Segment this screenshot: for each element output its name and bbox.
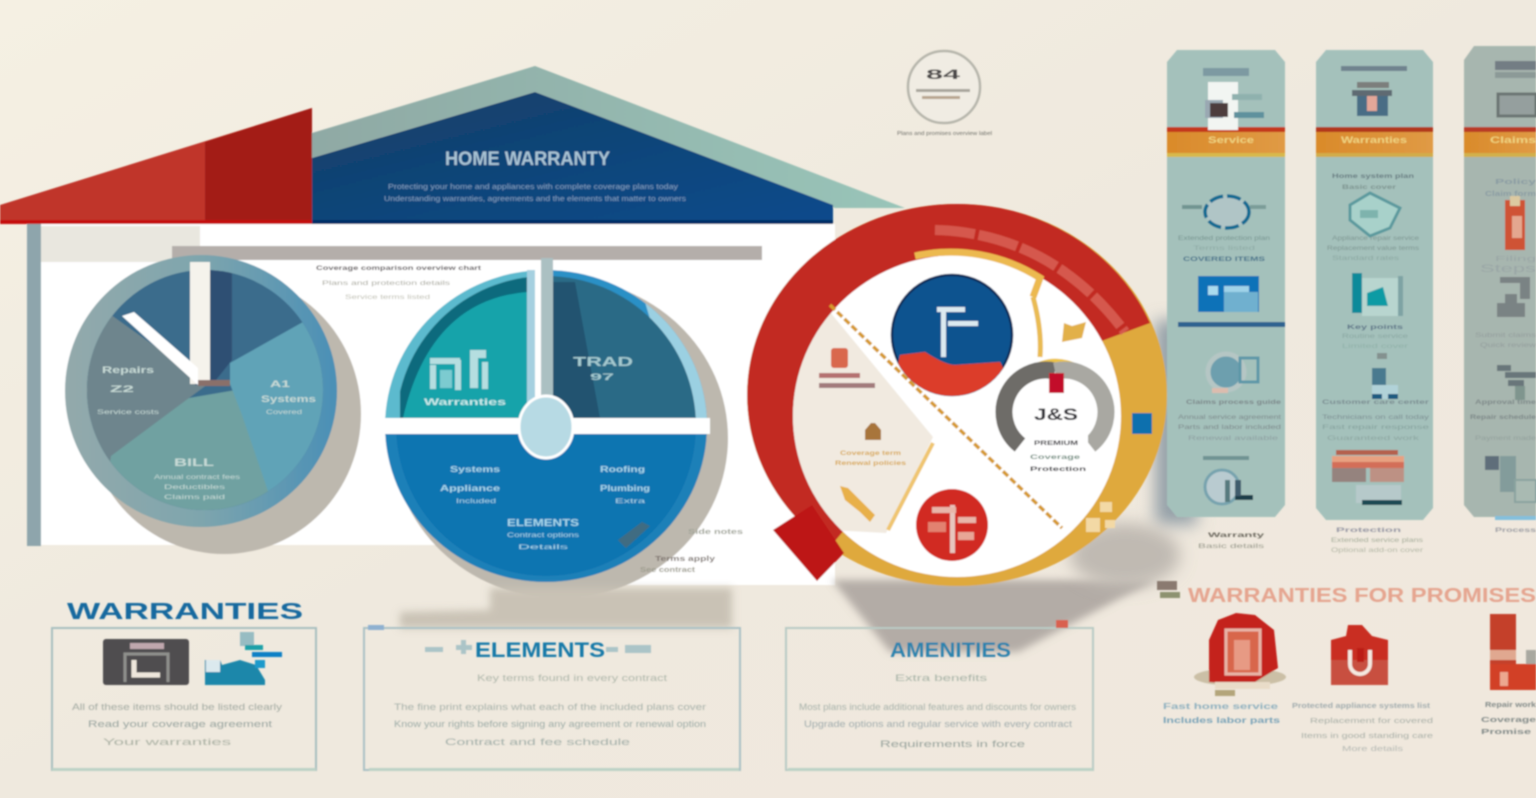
col 3 text b: Steps bbox=[1480, 263, 1536, 275]
roof title: HOME WARRANTY bbox=[445, 149, 610, 170]
title ornaments bbox=[425, 640, 651, 654]
column panel 3 bbox=[1464, 46, 1536, 517]
pie chart 2 bbox=[380, 258, 715, 589]
column 3 caption bbox=[1495, 516, 1536, 534]
col 2 text c: Routine service bbox=[1342, 334, 1409, 340]
col 2 text b: Appliance repair service bbox=[1332, 236, 1420, 242]
column panel 1 bbox=[1167, 50, 1285, 517]
pie 1 shadow bbox=[87, 274, 361, 554]
blue card bbox=[1198, 276, 1259, 312]
gauge text: Protection bbox=[1030, 467, 1087, 473]
dark slice label: TRAD bbox=[573, 354, 633, 369]
icon: teal tool bbox=[205, 632, 282, 685]
col 2 text c: Limited cover bbox=[1342, 344, 1408, 350]
house icon bbox=[430, 350, 488, 390]
middle caption: More details bbox=[1342, 746, 1404, 753]
gauge text: PREMIUM bbox=[1034, 441, 1078, 447]
red accent bbox=[1056, 620, 1068, 628]
cream slice bbox=[780, 312, 933, 533]
column 2 caption: Extended service plans bbox=[1331, 538, 1423, 544]
icon: chart bbox=[1352, 273, 1403, 316]
col 1 gray text: Annual service agreement bbox=[1178, 415, 1281, 421]
slice rules bbox=[819, 373, 860, 378]
pie 2 shadow bbox=[392, 278, 728, 598]
blue square marker bbox=[1132, 413, 1152, 434]
pie 1 labels: A1 bbox=[270, 379, 290, 389]
column 2 heading: Warranties bbox=[1341, 135, 1407, 145]
right caption bbox=[1481, 702, 1536, 736]
clock hands bbox=[190, 262, 210, 384]
roof description: Understanding warranties, agreements and the elements that matter to owners bbox=[384, 194, 686, 203]
box 1 text: Read your coverage agreement bbox=[88, 719, 273, 729]
column 2 caption: Optional add-on cover bbox=[1331, 548, 1423, 554]
white main panel bbox=[41, 224, 835, 585]
col 3 text d: Approval time bbox=[1475, 400, 1536, 406]
lower slice labels: Roofing bbox=[600, 465, 645, 474]
pie 1 labels: Repairs bbox=[102, 365, 154, 375]
box: warranties bbox=[52, 628, 316, 771]
box 3 text: Requirements in force bbox=[880, 739, 1025, 749]
middle caption: Replacement for covered bbox=[1310, 718, 1433, 725]
column 3 caption: Process bbox=[1495, 528, 1536, 534]
pie chart 1 bbox=[60, 255, 361, 554]
col 3 text c: Submit claims bbox=[1475, 333, 1536, 339]
right caption: Promise bbox=[1481, 729, 1531, 736]
teal roof band bbox=[312, 66, 905, 208]
icon: gear bbox=[1208, 354, 1258, 393]
lower slice labels: Plumbing bbox=[600, 484, 650, 493]
pie 1 labels bbox=[97, 365, 316, 501]
column 1 caption: Warranty bbox=[1208, 533, 1265, 539]
column 1 caption bbox=[1198, 533, 1265, 550]
middle caption: Items in good standing care bbox=[1301, 733, 1433, 740]
teal label: Warranties bbox=[424, 397, 506, 407]
icon: diamond gear bbox=[1350, 193, 1400, 236]
box 1 text bbox=[72, 702, 283, 747]
col 3 text d: Payment made bbox=[1475, 436, 1536, 442]
column panel 2 bbox=[1316, 50, 1433, 520]
box 3 text: Most plans include additional features and discounts for owners bbox=[799, 702, 1077, 712]
icon captions: Fast home service bbox=[1163, 702, 1279, 711]
column 2 caption bbox=[1331, 528, 1423, 554]
pie 2 side notes: Side notes bbox=[688, 529, 743, 536]
dark slice label bbox=[573, 354, 633, 382]
box 2 text: The fine print explains what each of the included plans cover bbox=[394, 702, 706, 712]
pencil mark bbox=[618, 522, 650, 548]
icon: red bottle bbox=[1505, 196, 1525, 250]
col 2 gray text: Fast repair response bbox=[1322, 425, 1430, 431]
icon: document bbox=[1203, 68, 1264, 130]
pie 1 labels: BILL bbox=[174, 457, 214, 469]
pie 1 labels: Deductibles bbox=[164, 484, 226, 491]
small red circle icon bbox=[916, 489, 988, 561]
col 1 gray text: Parts and labor included bbox=[1178, 425, 1281, 431]
lower slice labels: ELEMENTS bbox=[507, 518, 579, 529]
col 1 text: COVERED ITEMS bbox=[1183, 257, 1265, 263]
col 1 gray text: Renewal available bbox=[1188, 436, 1279, 442]
col 2 text a: Home system plan bbox=[1332, 174, 1414, 180]
icon captions bbox=[1163, 702, 1281, 725]
column 1 caption: Basic details bbox=[1198, 544, 1264, 550]
slice label: Coverage term bbox=[840, 451, 901, 457]
box 2 text bbox=[394, 673, 706, 747]
crossbar label: Coverage comparison overview chart bbox=[316, 265, 482, 272]
top medallion: Plans and promises overview label bbox=[897, 131, 992, 137]
pie 1 labels: Claims paid bbox=[164, 494, 226, 501]
pie 1 labels: Covered bbox=[266, 410, 302, 416]
lower slice labels bbox=[440, 465, 650, 551]
panel left post bbox=[27, 224, 41, 546]
column 2 caption: Protection bbox=[1336, 528, 1402, 534]
col 3 text a: Claim form bbox=[1485, 191, 1536, 198]
pie 2 side notes: Terms apply bbox=[655, 556, 715, 563]
icon captions: Includes labor parts bbox=[1163, 716, 1281, 725]
icon: red bottle bbox=[1490, 614, 1536, 690]
crossbar label: Plans and protection details bbox=[322, 280, 451, 287]
amenities title: AMENITIES bbox=[890, 639, 1011, 662]
lower slice labels: Extra bbox=[615, 499, 646, 505]
slice small icon bbox=[865, 423, 881, 440]
pie 1 labels: Service costs bbox=[97, 410, 159, 416]
blue circle icon bbox=[890, 274, 1020, 400]
gauge text bbox=[1030, 405, 1087, 473]
box: amenities bbox=[786, 628, 1093, 771]
dark slice label: 97 bbox=[590, 372, 614, 382]
box 3 text: Upgrade options and regular service with every contract bbox=[804, 719, 1073, 729]
col 3 text d bbox=[1470, 400, 1536, 442]
heading marker bbox=[1157, 581, 1180, 598]
pie 1 labels: Systems bbox=[261, 394, 316, 404]
gauge text: J&S bbox=[1034, 405, 1078, 424]
top crossbar bbox=[172, 246, 762, 260]
col 3 top icon bbox=[1495, 61, 1536, 116]
red arc highlights bbox=[935, 230, 1125, 332]
inner white disc bbox=[793, 255, 1121, 577]
col 3 text b: Filing bbox=[1495, 256, 1536, 263]
col 2 text b: Standard rates bbox=[1332, 256, 1399, 262]
crossbar label: Service terms listed bbox=[345, 294, 431, 301]
top medallion: 84 bbox=[926, 66, 960, 82]
gold arrows bbox=[840, 486, 875, 522]
slice marker bbox=[831, 348, 848, 368]
lower slice labels: Contract options bbox=[507, 533, 579, 539]
lower slice labels: Details bbox=[518, 545, 568, 551]
lower slice labels: Included bbox=[456, 499, 496, 505]
lower slice labels: Systems bbox=[450, 465, 501, 474]
top medallion bbox=[897, 51, 992, 137]
gauge ring bbox=[1004, 370, 1106, 475]
slice label bbox=[835, 451, 907, 467]
roof description: Protecting your home and appliances with complete coverage plans today bbox=[388, 182, 678, 191]
box 3 text: Extra benefits bbox=[895, 673, 988, 683]
col 2 text c bbox=[1342, 325, 1409, 350]
gold outer ring bbox=[747, 204, 1167, 586]
gold inner rim bbox=[915, 252, 1040, 297]
icon: wrench 3 bbox=[1485, 456, 1536, 502]
icon: figure bbox=[1497, 277, 1530, 317]
icon: dark appliance bbox=[103, 639, 189, 685]
panel top band bbox=[41, 226, 200, 262]
shadow of ring bbox=[832, 320, 1197, 652]
red arrow tip bbox=[773, 505, 844, 581]
col 3 text b bbox=[1480, 256, 1536, 275]
icon: red bell bbox=[1194, 613, 1286, 696]
shadow below pie 2 bbox=[400, 588, 732, 628]
column 3 heading: Claims bbox=[1490, 135, 1536, 145]
lower slice labels: Appliance bbox=[440, 484, 501, 493]
col 2 gray text: Guaranteed work bbox=[1327, 436, 1421, 442]
pie 2 side notes: See contract bbox=[640, 567, 696, 574]
column 1 heading: Service bbox=[1208, 135, 1254, 145]
icon: tools bbox=[1497, 365, 1536, 400]
gauge text: Coverage bbox=[1030, 455, 1081, 461]
middle caption bbox=[1292, 703, 1433, 753]
col 2 text b bbox=[1327, 236, 1420, 262]
ring icon bbox=[1086, 502, 1115, 532]
col 2 text a: Basic cover bbox=[1342, 185, 1397, 191]
elements title: ELEMENTS bbox=[475, 639, 605, 662]
icon: red lock bbox=[1331, 625, 1388, 685]
promises heading: WARRANTIES FOR PROMISES bbox=[1188, 585, 1536, 607]
col 1 text: Extended protection plan bbox=[1178, 236, 1270, 242]
icon: home box bbox=[1341, 66, 1407, 116]
center hub bbox=[519, 396, 573, 458]
col 2 gray text: Customer care center bbox=[1322, 400, 1430, 406]
col 1 gray text bbox=[1178, 400, 1282, 442]
col 3 text c: Quick review bbox=[1480, 343, 1536, 349]
col 2 gray text bbox=[1322, 400, 1430, 442]
box 3 text bbox=[799, 673, 1077, 749]
gold dividers bbox=[830, 305, 1062, 528]
pie 2 side notes bbox=[640, 529, 743, 574]
col 2 gray text: Technicians on call today bbox=[1322, 415, 1429, 421]
roof description bbox=[384, 182, 686, 203]
red arc bbox=[747, 204, 1150, 547]
slice label: Renewal policies bbox=[835, 461, 907, 467]
crossbar label bbox=[316, 265, 482, 301]
center divider bbox=[384, 418, 710, 434]
col 1 gray text: Claims process guide bbox=[1186, 400, 1282, 406]
box 1 text: Your warranties bbox=[103, 737, 232, 747]
box 2 text: Contract and fee schedule bbox=[445, 737, 630, 747]
icon: wrench bbox=[1203, 456, 1253, 504]
box: elements bbox=[364, 625, 740, 771]
right caption: Coverage bbox=[1481, 717, 1536, 724]
col 3 text d: Repair schedule bbox=[1470, 415, 1536, 421]
col 2 text c: Key points bbox=[1347, 325, 1404, 331]
right caption: Repair work bbox=[1485, 702, 1536, 709]
col 2 text b: Replacement value terms bbox=[1327, 246, 1419, 252]
col 2 text a bbox=[1332, 174, 1414, 191]
blue roof with heading bbox=[312, 92, 833, 224]
col 1 text: Terms listed bbox=[1193, 246, 1255, 252]
pie 1 labels: Z2 bbox=[110, 384, 134, 394]
box 2 text: Key terms found in every contract bbox=[477, 673, 668, 683]
icon: red house bbox=[1332, 450, 1404, 505]
pie 1 labels: Annual contract fees bbox=[154, 474, 241, 481]
icon: ring bbox=[1182, 196, 1266, 228]
col 1 text bbox=[1178, 236, 1270, 263]
navy rule bbox=[1178, 322, 1285, 327]
icon: person bbox=[1372, 353, 1398, 399]
box 2 text: Know your rights before signing any agreement or renewal option bbox=[394, 719, 706, 729]
box 1 text: All of these items should be listed clearly bbox=[72, 702, 283, 712]
gold arc around gauge bbox=[1030, 362, 1093, 378]
col 3 text a bbox=[1485, 179, 1536, 198]
red roof bbox=[0, 108, 312, 224]
middle caption: Protected appliance systems list bbox=[1292, 703, 1431, 710]
flag glyph bbox=[937, 307, 978, 357]
circular diagram bbox=[747, 204, 1167, 586]
warranties heading: WARRANTIES bbox=[67, 598, 303, 624]
col 3 text c bbox=[1475, 333, 1536, 349]
col 3 text a: Policy bbox=[1495, 179, 1536, 186]
